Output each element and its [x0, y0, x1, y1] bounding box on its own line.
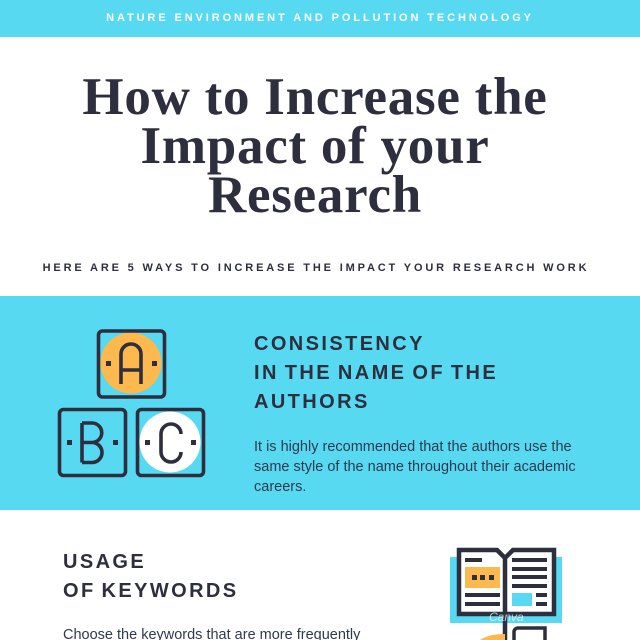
subtitle: HERE ARE 5 WAYS TO INCREASE THE IMPACT YOUR RESEARCH WORK	[43, 262, 589, 274]
watermark: Canva	[489, 610, 524, 624]
heading: consistency	[254, 332, 498, 412]
heading: keywords	[63, 550, 239, 602]
icon: open book	[450, 548, 562, 640]
main title: Impact of your	[140, 117, 490, 175]
heading: consistency: CONSISTENCY	[254, 332, 425, 354]
body: consistency: same style of the name throughout their academic	[254, 459, 576, 475]
main title: Research	[208, 166, 422, 224]
banner title: NATURE ENVIRONMENT AND POLLUTION TECHNOLOGY	[106, 12, 534, 24]
heading: consistency: AUTHORS	[254, 390, 370, 412]
main title	[82, 68, 548, 224]
body: consistency: careers.	[254, 479, 306, 495]
icon: ABC blocks	[58, 329, 206, 478]
heading: consistency: IN THE NAME OF THE	[254, 362, 498, 384]
body: consistency	[254, 439, 576, 495]
heading: keywords: OF KEYWORDS	[63, 580, 239, 602]
heading: keywords: USAGE	[63, 550, 146, 572]
main title: How to Increase the	[82, 68, 548, 126]
body: consistency: It is highly recommended that the authors use the	[254, 439, 572, 455]
panel: consistency	[0, 296, 640, 510]
top banner	[0, 0, 640, 37]
